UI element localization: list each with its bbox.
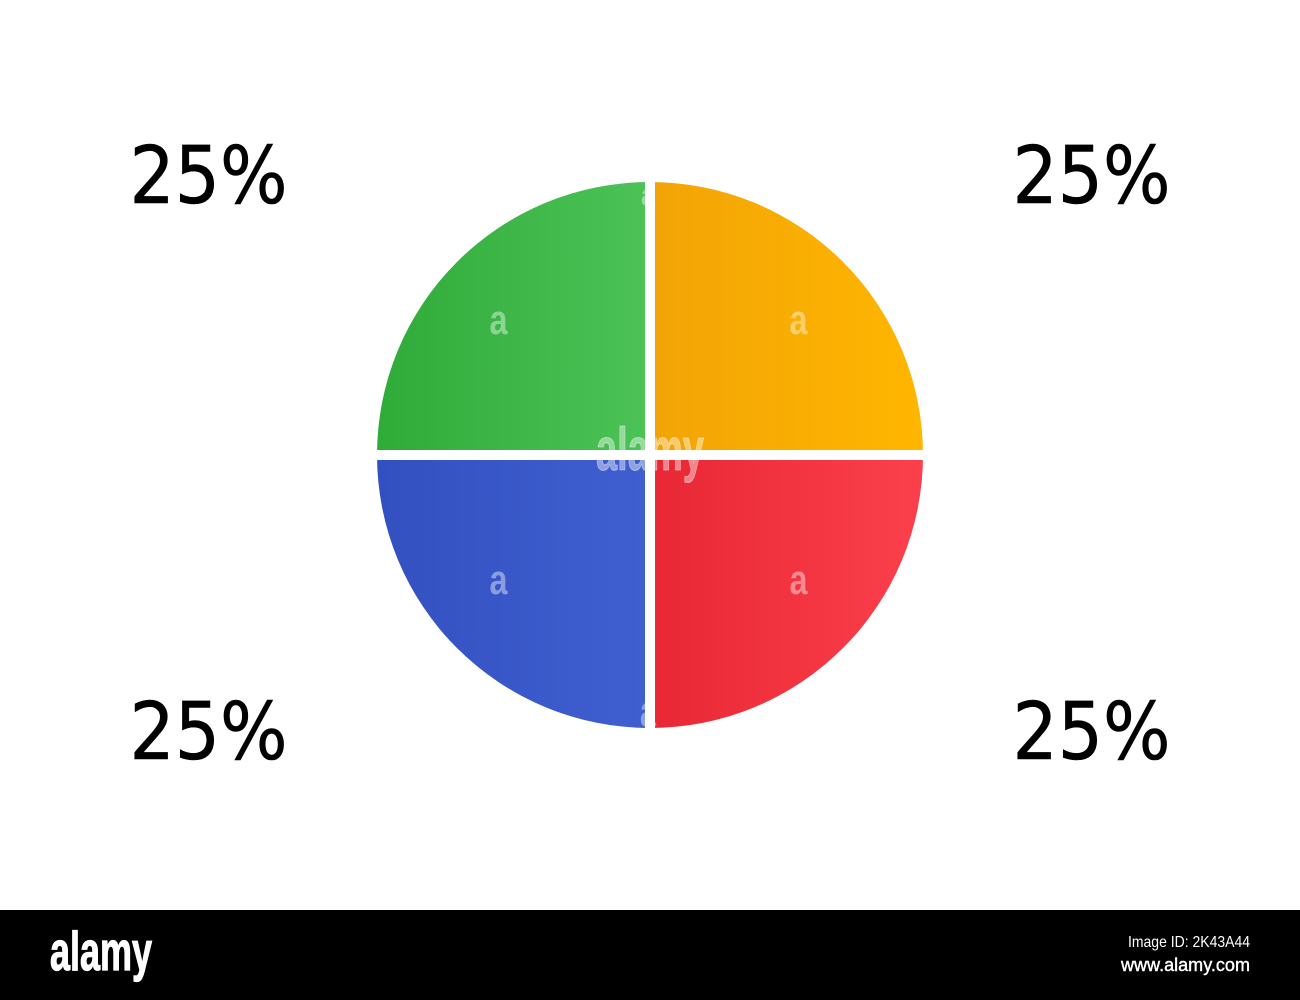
label: bottom-left 25%: 25% — [130, 686, 288, 778]
slice: orange 25% — [655, 182, 923, 450]
footer logo: alamy — [50, 920, 152, 982]
image id: Image ID: 2K43A44 — [1128, 934, 1250, 951]
footer bar — [0, 910, 1300, 1000]
watermark overlay: a — [490, 296, 508, 343]
label: top-right 25%: 25% — [1012, 130, 1170, 222]
watermark overlay: alamy — [596, 416, 704, 483]
website: www.alamy.com — [1120, 955, 1250, 975]
label: bottom-right 25%: 25% — [1012, 686, 1170, 778]
pie chart — [377, 182, 923, 728]
label: top-left 25%: 25% — [130, 130, 288, 222]
watermark overlay: a — [790, 556, 808, 603]
watermark overlay: a — [640, 687, 656, 736]
watermark overlay: a — [641, 179, 655, 212]
slice: green 25% — [377, 182, 645, 450]
watermark overlay — [490, 179, 808, 736]
watermark overlay: a — [790, 296, 808, 343]
slice: red 25% — [655, 460, 923, 728]
slice: blue 25% — [377, 460, 645, 728]
cross gap — [370, 175, 930, 735]
watermark overlay: a — [490, 556, 508, 603]
